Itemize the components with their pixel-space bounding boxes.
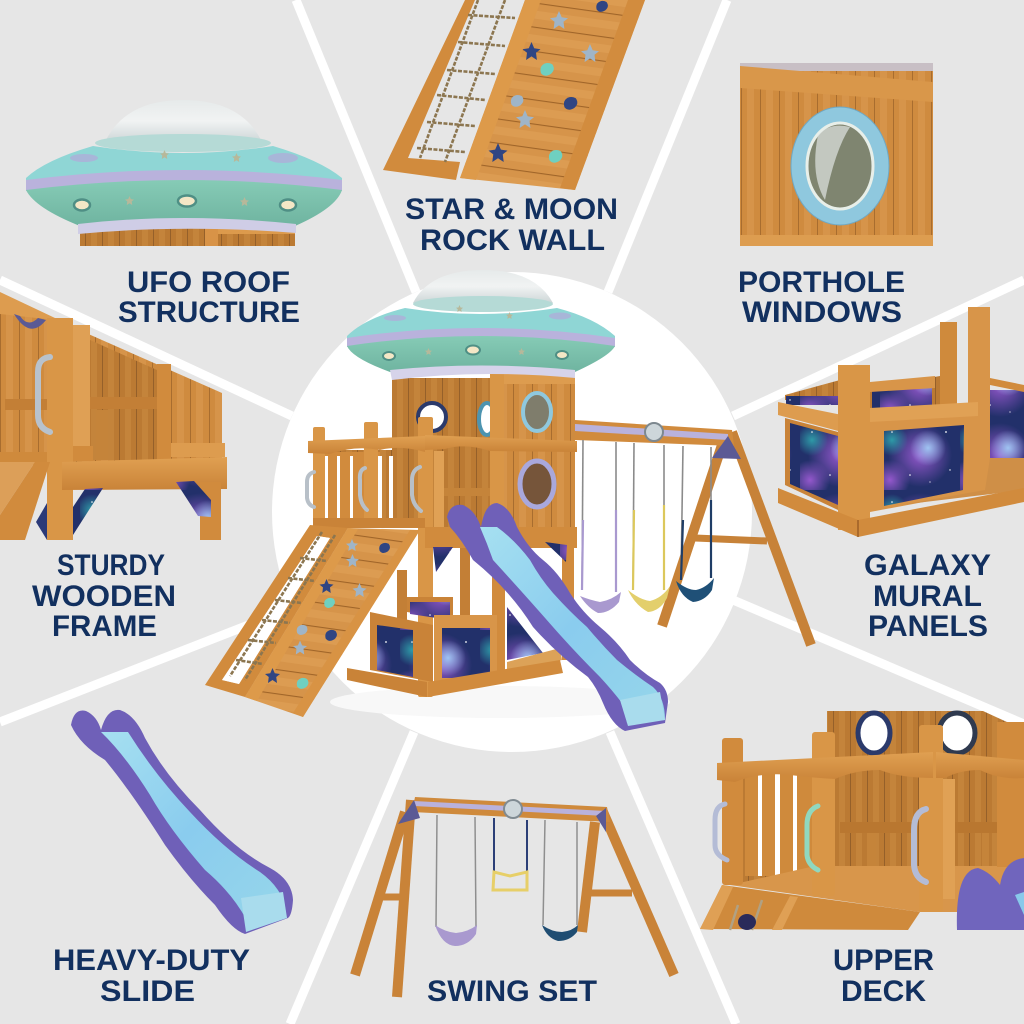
label: galaxy mural panels [864,549,991,643]
slide detail image [71,710,293,934]
label: galaxy mural panels: MURAL [873,580,982,613]
climbing net frame [205,525,348,697]
rock wall detail image [383,0,645,190]
swing set detail image [355,797,674,997]
label: star and moon rock wall: ROCK WALL [420,224,605,257]
lower structure [347,527,577,697]
label: porthole windows: WINDOWS [742,296,902,329]
label: sturdy wooden frame: WOODEN [32,580,176,613]
label: porthole windows [738,266,905,329]
UFO detail image [26,100,342,246]
label: UFO roof structure: STRUCTURE [118,296,300,329]
panel: galaxy mural panels [778,307,1024,643]
label: UFO roof structure: UFO ROOF [127,266,290,299]
label: star and moon rock wall [405,193,618,257]
panel: heavy-duty slide [53,710,293,1008]
frame detail image [0,292,227,540]
label: sturdy wooden frame: FRAME [52,610,157,643]
porthole detail image [740,63,933,246]
label: UFO roof structure [118,266,300,329]
panel: star and moon rock wall [383,0,645,257]
rock climbing wall [245,528,420,717]
label: galaxy mural panels: GALAXY [864,549,991,582]
deck railing [308,417,577,697]
label: upper deck: DECK [841,975,926,1008]
swings [580,440,714,613]
label: galaxy mural panels: PANELS [868,610,988,643]
panel: swing set [355,797,674,1008]
label: sturdy wooden frame: STURDY [57,549,165,582]
label: porthole windows: PORTHOLE [738,266,905,299]
label: sturdy wooden frame [32,549,176,643]
panel: porthole windows [738,63,933,329]
swing set frame [575,420,811,645]
label: upper deck: UPPER [833,944,934,977]
UFO roof [347,270,615,380]
label: heavy-duty slide: HEAVY-DUTY [53,944,250,977]
ground shadow [330,686,670,718]
panel: upper deck [700,711,1024,1008]
upper deck detail image [700,711,1024,930]
panel: sturdy wooden frame [0,292,227,643]
label: star and moon rock wall: STAR & MOON [405,193,618,226]
label: swing set: SWING SET [427,975,597,1008]
label: heavy-duty slide: SLIDE [100,975,195,1008]
grab handles [307,467,421,511]
main slide [447,503,668,731]
central playset illustration [205,270,811,731]
tower [392,368,575,536]
label: heavy-duty slide [53,944,250,1008]
label: upper deck [833,944,934,1008]
panel: UFO roof structure [26,100,342,329]
galaxy detail image [778,307,1024,537]
